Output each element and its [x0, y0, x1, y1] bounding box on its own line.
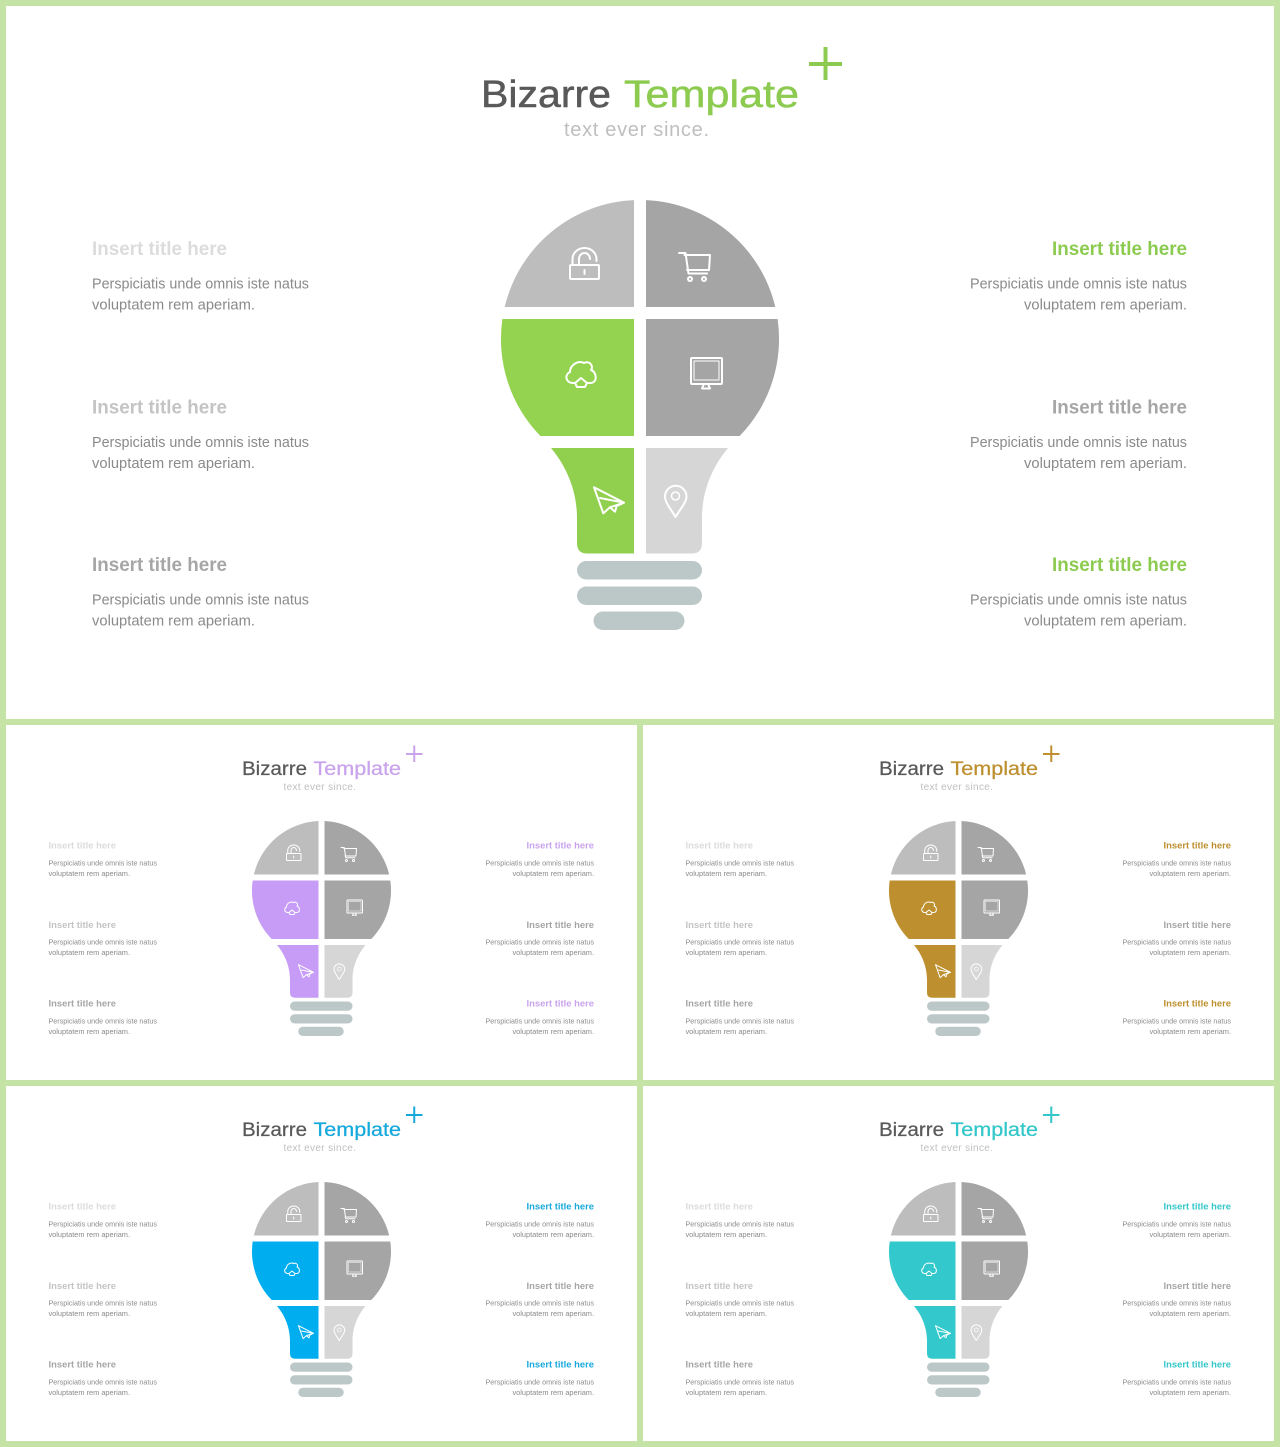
right text block 1: voluptatem rem aperiam.: [1150, 1230, 1231, 1239]
left text block 3: Perspiciatis unde omnis iste natus: [686, 1377, 794, 1386]
right text block 1: Insert title here: [1052, 239, 1187, 260]
icon: monitor: [984, 1261, 1000, 1276]
left text block 3: Insert title here: [48, 1360, 116, 1370]
right text block 3: Insert title here: [526, 998, 594, 1010]
right text block 1: Perspiciatis unde omnis iste natus: [970, 276, 1187, 292]
icon: map pin: [334, 1325, 345, 1340]
left text block 2: Insert title here: [686, 1281, 753, 1292]
title: [879, 1120, 1038, 1141]
left text block 1: [686, 840, 794, 878]
icon: map pin: [665, 486, 686, 517]
left text block 2: Insert title here: [686, 920, 753, 931]
right text block 3: voluptatem rem aperiam.: [512, 1027, 594, 1036]
title: [242, 1120, 401, 1141]
left text block 3: voluptatem rem aperiam.: [686, 1027, 767, 1036]
panel: main green slide: [6, 6, 1274, 719]
left text block 1: [686, 1202, 794, 1239]
right text block 3: [1122, 1360, 1231, 1397]
left text block 1: Perspiciatis unde omnis iste natus: [48, 1219, 157, 1228]
plus mark: [1043, 746, 1060, 762]
right text block 3: Perspiciatis unde omnis iste natus: [486, 1377, 594, 1386]
icon: map pin: [971, 1325, 982, 1340]
right text block 2: Perspiciatis unde omnis iste natus: [1122, 1298, 1231, 1308]
right text block 3: [1122, 998, 1231, 1036]
left text block 2: Insert title here: [48, 920, 116, 931]
title: Template: [314, 759, 401, 780]
icon: cloud: [285, 902, 299, 914]
left text block 1: [48, 840, 157, 878]
right text block 2: Insert title here: [526, 1281, 594, 1292]
right text block 3: voluptatem rem aperiam.: [1150, 1027, 1231, 1036]
icon: monitor: [347, 900, 362, 915]
icon: cloud: [922, 902, 936, 914]
left text block 3: Insert title here: [48, 998, 116, 1010]
left text block 3: Perspiciatis unde omnis iste natus: [686, 1016, 794, 1025]
right text block 2: voluptatem rem aperiam.: [512, 948, 594, 957]
right text block 2: Perspiciatis unde omnis iste natus: [486, 1298, 594, 1308]
left text block 3: Perspiciatis unde omnis iste natus: [48, 1016, 157, 1025]
icon: paper plane: [298, 965, 314, 978]
left text block 2: Perspiciatis unde omnis iste natus: [686, 1298, 794, 1308]
right text block 2: [486, 1281, 594, 1318]
left text block 2: [686, 1281, 794, 1318]
right text block 1: Insert title here: [526, 840, 594, 852]
right text block 2: Insert title here: [1164, 920, 1231, 931]
left text block 1: Perspiciatis unde omnis iste natus: [686, 1219, 794, 1228]
right text block 3: [486, 998, 594, 1036]
left text block 3: [48, 1360, 157, 1397]
right text block 2: voluptatem rem aperiam.: [1150, 1309, 1231, 1318]
left text block 3: Perspiciatis unde omnis iste natus: [48, 1377, 157, 1386]
right text block 3: Perspiciatis unde omnis iste natus: [1122, 1377, 1231, 1386]
left text block 1: voluptatem rem aperiam.: [92, 298, 255, 314]
right text block 1: voluptatem rem aperiam.: [1150, 869, 1231, 878]
right text block 3: Perspiciatis unde omnis iste natus: [486, 1016, 594, 1025]
title: Bizarre: [879, 1120, 944, 1141]
left text block 3: Perspiciatis unde omnis iste natus: [92, 592, 309, 608]
right text block 1: [970, 239, 1187, 314]
subtitle: text ever since.: [284, 782, 356, 793]
icon: cart: [978, 848, 994, 862]
left text block 1: Insert title here: [92, 239, 227, 260]
right text block 1: [1122, 1202, 1231, 1239]
right text block 2: Insert title here: [1164, 1281, 1231, 1292]
left text block 3: Insert title here: [92, 555, 227, 576]
title: [879, 759, 1038, 780]
slide content: gold: [686, 746, 1231, 1036]
left text block 1: [48, 1202, 157, 1239]
right text block 3: voluptatem rem aperiam.: [512, 1388, 594, 1397]
left text block 1: [92, 239, 309, 314]
right text block 2: Perspiciatis unde omnis iste natus: [1122, 938, 1231, 946]
right text block 1: [1122, 840, 1231, 878]
left text block 1: voluptatem rem aperiam.: [48, 1230, 130, 1239]
right text block 2: [486, 920, 594, 957]
panel: purple slide: [6, 725, 637, 1080]
subtitle: text ever since.: [564, 119, 709, 141]
panel: blue slide: [6, 1086, 637, 1441]
right text block 2: voluptatem rem aperiam.: [1150, 948, 1231, 957]
left text block 3: Insert title here: [686, 1360, 753, 1370]
right text block 2: [970, 398, 1187, 472]
right text block 3: [486, 1360, 594, 1397]
right text block 2: voluptatem rem aperiam.: [1024, 456, 1187, 472]
title: Template: [314, 1120, 401, 1141]
title: Bizarre: [242, 1120, 307, 1141]
left text block 2: Insert title here: [92, 398, 227, 418]
slide content: blue: [48, 1106, 594, 1397]
left text block 1: Insert title here: [686, 840, 753, 852]
left text block 1: voluptatem rem aperiam.: [48, 869, 130, 878]
left text block 2: Perspiciatis unde omnis iste natus: [92, 435, 309, 451]
right text block 3: Perspiciatis unde omnis iste natus: [970, 592, 1187, 608]
icon: lock: [286, 845, 301, 860]
light bulb diagram: [252, 821, 391, 1036]
icon: map pin: [971, 964, 982, 980]
icon: monitor: [691, 358, 722, 388]
plus mark: [809, 47, 842, 80]
left text block 1: Insert title here: [48, 840, 116, 852]
subtitle: text ever since.: [920, 1143, 993, 1154]
right text block 3: Insert title here: [526, 1360, 594, 1370]
left text block 2: voluptatem rem aperiam.: [48, 948, 130, 957]
left text block 2: Perspiciatis unde omnis iste natus: [48, 1298, 157, 1308]
icon: cloud: [922, 1263, 936, 1276]
right text block 1: Perspiciatis unde omnis iste natus: [1122, 1219, 1231, 1228]
right text block 2: Insert title here: [1052, 398, 1187, 418]
right text block 1: Perspiciatis unde omnis iste natus: [486, 858, 594, 867]
right text block 1: Perspiciatis unde omnis iste natus: [486, 1219, 594, 1228]
left text block 3: voluptatem rem aperiam.: [48, 1027, 130, 1036]
left text block 2: Perspiciatis unde omnis iste natus: [686, 938, 794, 946]
plus mark: [406, 1106, 422, 1123]
panel: teal slide: [643, 1086, 1274, 1441]
subtitle: text ever since.: [284, 1143, 356, 1154]
panel: gold slide: [643, 725, 1274, 1080]
icon: map pin: [334, 964, 345, 980]
left text block 2: [48, 920, 157, 957]
right text block 3: Insert title here: [1052, 555, 1187, 576]
light bulb diagram: [889, 1182, 1028, 1397]
subtitle: text ever since.: [920, 782, 993, 793]
right text block 1: [486, 840, 594, 878]
icon: paper plane: [594, 487, 624, 513]
right text block 3: Perspiciatis unde omnis iste natus: [1122, 1016, 1231, 1025]
icon: cart: [341, 1208, 356, 1222]
title: Bizarre: [879, 759, 944, 780]
right text block 2: Perspiciatis unde omnis iste natus: [970, 435, 1187, 451]
icon: monitor: [347, 1261, 362, 1276]
right text block 3: voluptatem rem aperiam.: [1024, 614, 1187, 630]
left text block 1: Perspiciatis unde omnis iste natus: [48, 858, 157, 867]
icon: paper plane: [298, 1326, 314, 1339]
title: [481, 74, 799, 116]
icon: monitor: [984, 900, 1000, 915]
right text block 3: Insert title here: [1164, 998, 1231, 1010]
left text block 1: voluptatem rem aperiam.: [686, 869, 767, 878]
plus mark: [1043, 1106, 1060, 1123]
right text block 1: voluptatem rem aperiam.: [512, 869, 594, 878]
left text block 1: Insert title here: [686, 1202, 753, 1212]
light bulb diagram: [889, 821, 1028, 1036]
icon: lock: [924, 845, 938, 860]
right text block 1: [486, 1202, 594, 1239]
left text block 3: [686, 1360, 794, 1397]
right text block 1: voluptatem rem aperiam.: [1024, 298, 1187, 314]
left text block 1: Perspiciatis unde omnis iste natus: [686, 858, 794, 867]
icon: lock: [286, 1206, 301, 1222]
icon: cart: [978, 1208, 994, 1222]
right text block 1: voluptatem rem aperiam.: [512, 1230, 594, 1239]
right text block 2: [1122, 920, 1231, 957]
right text block 1: Perspiciatis unde omnis iste natus: [1122, 858, 1231, 867]
title: Bizarre: [242, 759, 307, 780]
left text block 3: [48, 998, 157, 1036]
left text block 2: Insert title here: [48, 1281, 116, 1292]
left text block 2: [686, 920, 794, 957]
title: Template: [950, 759, 1038, 780]
left text block 2: Perspiciatis unde omnis iste natus: [48, 938, 157, 946]
right text block 1: Insert title here: [1164, 840, 1231, 852]
left text block 2: voluptatem rem aperiam.: [48, 1309, 130, 1318]
left text block 2: [48, 1281, 157, 1318]
title: Bizarre: [481, 74, 611, 116]
left text block 1: Insert title here: [48, 1202, 116, 1212]
left text block 3: [686, 998, 794, 1036]
right text block 3: voluptatem rem aperiam.: [1150, 1388, 1231, 1397]
right text block 2: voluptatem rem aperiam.: [512, 1309, 594, 1318]
light bulb diagram: [501, 200, 779, 630]
right text block 2: [1122, 1281, 1231, 1318]
slide content: green: [92, 47, 1187, 630]
right text block 3: [970, 555, 1187, 630]
left text block 2: [92, 398, 309, 472]
title: Template: [950, 1120, 1038, 1141]
left text block 2: voluptatem rem aperiam.: [686, 1309, 767, 1318]
left text block 3: Insert title here: [686, 998, 753, 1010]
left text block 1: Perspiciatis unde omnis iste natus: [92, 276, 309, 292]
slide content: teal: [686, 1106, 1231, 1397]
left text block 3: voluptatem rem aperiam.: [686, 1388, 767, 1397]
left text block 1: voluptatem rem aperiam.: [686, 1230, 767, 1239]
right text block 3: Insert title here: [1164, 1360, 1231, 1370]
title: Template: [624, 74, 799, 116]
plus mark: [406, 746, 422, 762]
icon: cloud: [566, 362, 596, 387]
title: [242, 759, 401, 780]
icon: paper plane: [936, 965, 950, 978]
icon: lock: [570, 248, 599, 279]
slide content: purple: [48, 746, 594, 1036]
left text block 3: [92, 555, 309, 630]
right text block 2: Perspiciatis unde omnis iste natus: [486, 938, 594, 946]
right text block 2: Insert title here: [526, 920, 594, 931]
icon: cart: [679, 253, 710, 281]
icon: paper plane: [936, 1326, 950, 1339]
light bulb diagram: [252, 1182, 391, 1397]
icon: lock: [924, 1206, 938, 1222]
right text block 1: Insert title here: [526, 1202, 594, 1212]
icon: cloud: [285, 1263, 299, 1276]
right text block 1: Insert title here: [1164, 1202, 1231, 1212]
left text block 3: voluptatem rem aperiam.: [92, 614, 255, 630]
left text block 2: voluptatem rem aperiam.: [92, 456, 255, 472]
left text block 2: voluptatem rem aperiam.: [686, 948, 767, 957]
left text block 3: voluptatem rem aperiam.: [48, 1388, 130, 1397]
icon: cart: [341, 848, 356, 862]
